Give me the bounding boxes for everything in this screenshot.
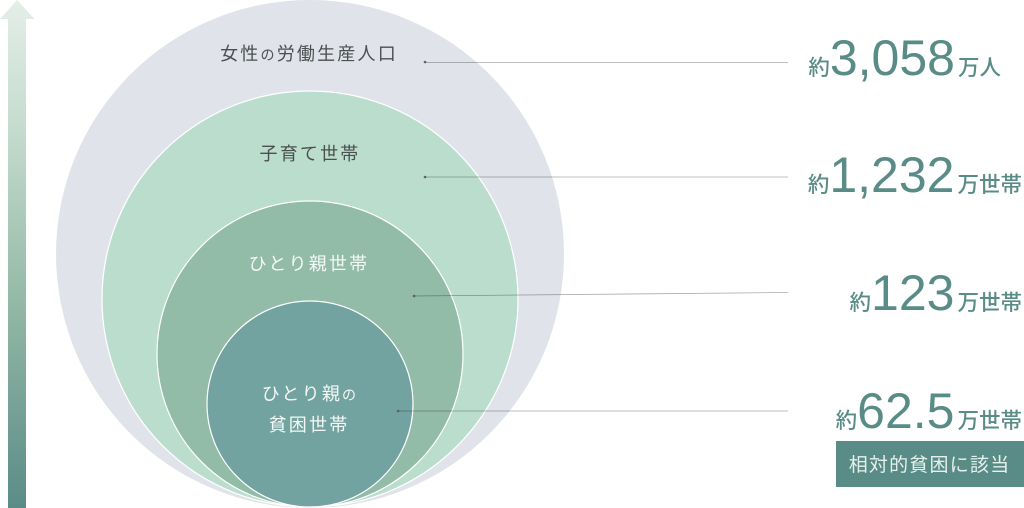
value: 3,058: 約3,058万人 <box>808 30 1001 86</box>
label: single-parent households: ひとり親世帯 <box>249 254 369 274</box>
circle: single-parent households <box>157 201 463 507</box>
circle: female working population <box>56 0 564 508</box>
label: single-parent poverty households: ひとり親の <box>262 384 358 404</box>
value: 1,232: 約1,232万世帯 <box>808 147 1022 203</box>
callout: relative poverty: 相対的貧困に該当 <box>849 454 1010 476</box>
callout: relative poverty <box>836 441 1024 487</box>
icon: vertical gradient arrow <box>0 0 34 508</box>
label: child-rearing households: 子育て世帯 <box>260 144 360 164</box>
label: poverty households second line: 貧困世帯 <box>269 415 349 435</box>
value: 123: 約123万世帯 <box>850 265 1022 321</box>
value: 62.5: 約62.5万世帯 <box>836 383 1022 439</box>
leader line 3 <box>413 292 788 297</box>
circle: child-rearing households <box>102 91 518 507</box>
leader line 4 <box>397 410 788 412</box>
leader line 1 <box>424 61 788 63</box>
leader line 2 <box>424 176 788 178</box>
circle: single-parent poverty households <box>207 301 413 507</box>
panel: nested circles <box>56 0 564 508</box>
label: female working population: 女性の労働生産人口 <box>220 44 398 64</box>
